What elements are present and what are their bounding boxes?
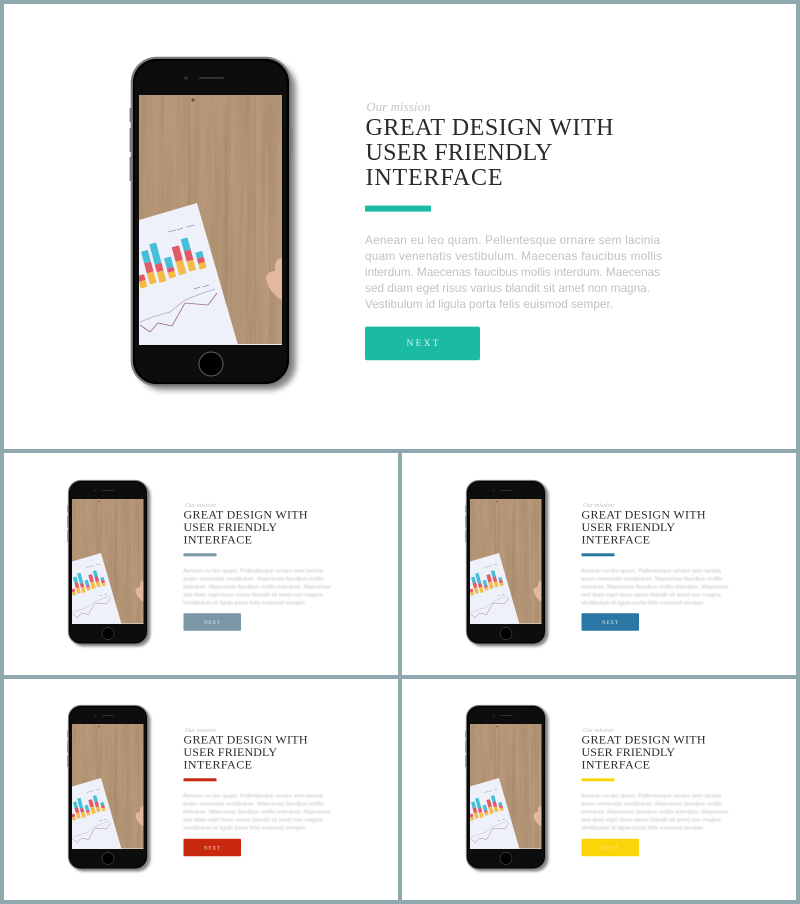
text block: mission heading and copy — [183, 502, 331, 606]
button: next: NEXT — [406, 339, 439, 349]
panel: main teal slide — [4, 4, 796, 449]
text block: mission heading and copy: USER FRIENDLY — [366, 140, 552, 166]
text block: mission heading and copy: GREAT DESIGN WITH — [366, 115, 614, 141]
text block: mission heading and copy: INTERFACE — [184, 758, 252, 772]
button: next — [184, 839, 241, 856]
text block: mission heading and copy: USER FRIENDLY — [582, 745, 675, 759]
text block: mission heading and copy — [365, 100, 662, 311]
panel: blue slide — [402, 453, 796, 675]
text block: mission heading and copy: sed diam eget risus varius blandit sit amet non magna. — [183, 592, 324, 598]
text block: mission heading and copy: GREAT DESIGN WITH — [184, 508, 308, 522]
button: next: NEXT — [602, 846, 618, 852]
button: next: NEXT — [204, 621, 220, 626]
panel: grey-blue slide — [4, 453, 398, 675]
text block: mission heading and copy: interdum. Maecenas faucibus mollis interdum. Maecenas — [365, 265, 660, 279]
panel: red slide — [4, 679, 398, 900]
button: next: NEXT — [204, 846, 220, 852]
text block: mission heading and copy: Our mission — [583, 502, 614, 509]
text block: mission heading and copy: quam venenatis vestibulum. Maecenas faucibus mollis — [183, 576, 324, 582]
text block: mission heading and copy: USER FRIENDLY — [582, 520, 675, 534]
text block: mission heading and copy: GREAT DESIGN WITH — [582, 732, 706, 746]
text block: mission heading and copy: quam venenatis vestibulum. Maecenas faucibus mollis — [581, 802, 722, 808]
text block: mission heading and copy: sed diam eget risus varius blandit sit amet non magna. — [183, 818, 324, 824]
button: next — [365, 327, 480, 360]
text block: mission heading and copy: Aenean eu leo quam. Pellentesque ornare sem lacinia — [365, 233, 660, 247]
text block: mission heading and copy: quam venenatis vestibulum. Maecenas faucibus mollis — [365, 249, 662, 263]
text block: mission heading and copy: interdum. Maecenas faucibus mollis interdum. Maecenas — [581, 810, 729, 816]
text block: mission heading and copy: Our mission — [366, 100, 430, 114]
text block: mission heading and copy: interdum. Maecenas faucibus mollis interdum. Maecenas — [183, 810, 331, 816]
text block: mission heading and copy: USER FRIENDLY — [184, 520, 277, 534]
text block: mission heading and copy: INTERFACE — [366, 165, 502, 191]
button: next: NEXT — [602, 621, 618, 626]
text block: mission heading and copy: sed diam eget risus varius blandit sit amet non magna. — [581, 818, 722, 824]
text block: mission heading and copy: Aenean eu leo quam. Pellentesque ornare sem lacinia — [183, 568, 324, 574]
text block: mission heading and copy: Our mission — [583, 727, 614, 734]
text block: mission heading and copy: interdum. Maecenas faucibus mollis interdum. Maecenas — [581, 584, 729, 590]
button: next — [582, 839, 639, 856]
text block: mission heading and copy: INTERFACE — [184, 532, 252, 546]
text block: mission heading and copy: Vestibulum id ligula porta felis euismod semper. — [581, 826, 705, 832]
button: next — [582, 613, 639, 631]
text block: mission heading and copy: sed diam eget risus varius blandit sit amet non magna. — [365, 281, 650, 295]
text block: mission heading and copy — [183, 727, 331, 832]
text block: mission heading and copy: USER FRIENDLY — [184, 745, 277, 759]
icon: phone with chart photo — [67, 705, 150, 872]
text block: mission heading and copy: Aenean eu leo quam. Pellentesque ornare sem lacinia — [581, 568, 722, 574]
icon: phone with chart photo — [465, 480, 548, 646]
button: next — [184, 613, 241, 631]
text block: mission heading and copy: Our mission — [185, 502, 216, 509]
text block: mission heading and copy: Our mission — [185, 727, 216, 734]
panel: yellow slide — [402, 679, 796, 900]
icon: phone with chart photo — [67, 480, 150, 646]
text block: mission heading and copy: GREAT DESIGN WITH — [184, 732, 308, 746]
icon: phone with chart photo — [465, 705, 548, 872]
text block: mission heading and copy: Vestibulum id ligula porta felis euismod semper. — [183, 826, 307, 832]
text block: mission heading and copy: interdum. Maecenas faucibus mollis interdum. Maecenas — [183, 584, 331, 590]
text block: mission heading and copy: Vestibulum id ligula porta felis euismod semper. — [183, 600, 307, 606]
text block: mission heading and copy: quam venenatis vestibulum. Maecenas faucibus mollis — [581, 576, 722, 582]
text block: mission heading and copy: GREAT DESIGN WITH — [582, 508, 706, 522]
text block: mission heading and copy: quam venenatis vestibulum. Maecenas faucibus mollis — [183, 802, 324, 808]
text block: mission heading and copy: Vestibulum id ligula porta felis euismod semper. — [581, 600, 705, 606]
text block: mission heading and copy: INTERFACE — [582, 758, 650, 772]
text block: mission heading and copy — [581, 502, 729, 606]
text block: mission heading and copy: Vestibulum id ligula porta felis euismod semper. — [365, 297, 613, 311]
text block: mission heading and copy: sed diam eget risus varius blandit sit amet non magna. — [581, 592, 722, 598]
text block: mission heading and copy: Aenean eu leo quam. Pellentesque ornare sem lacinia — [581, 794, 722, 800]
icon: phone with chart photo — [130, 58, 296, 390]
text block: mission heading and copy — [581, 727, 729, 832]
text block: mission heading and copy: INTERFACE — [582, 532, 650, 546]
text block: mission heading and copy: Aenean eu leo quam. Pellentesque ornare sem lacinia — [183, 794, 324, 800]
